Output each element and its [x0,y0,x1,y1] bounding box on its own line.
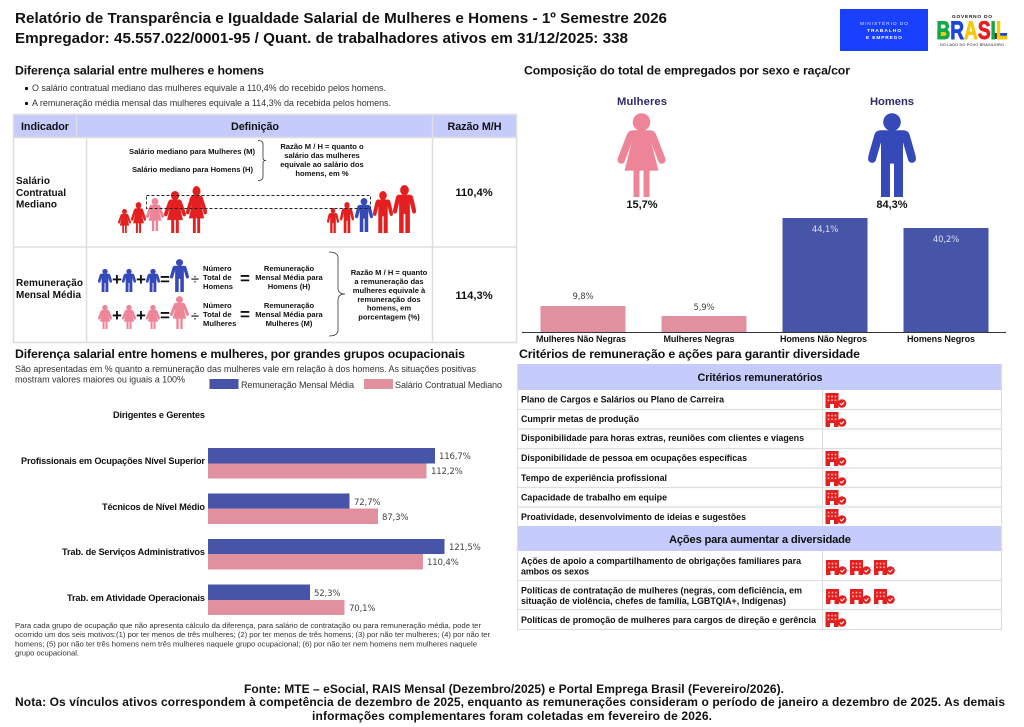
table header: Razão M/H [448,121,502,133]
bar chart: composição por sexo e raça/cor: Mulheres Não Negras [536,334,626,344]
category labels: Dirigentes e Gerentes [113,410,205,420]
list: critérios: Capacidade de trabalho em equipe [521,492,667,502]
values: 87,3% [382,513,408,523]
value: razão remuneração: 114,3% [455,290,493,302]
bar chart: composição por sexo e raça/cor: 44,1% [812,225,838,235]
bar chart: composição por sexo e raça/cor: 9,8% [572,292,594,302]
text block: nota de rodapé do gráfico: ocorrido um dos seis motivos:(1) por ter menos de três mulheres; (2) por ter menos de três homens; (3) por não ter mulheres; (4) por não ter [15,630,490,639]
definição: salário mediano: homens, em % [295,169,349,178]
pictogram: mulheres: 15,7% [626,199,658,211]
fórmula: homens: + [112,270,122,289]
text block: resumo: O salário contratual mediano das mulheres equivale a 110,4% do recebido pelos homens. [32,83,386,93]
values: 121,5% [449,543,481,553]
text block: nota de rodapé do gráfico: grupo ocupacional. [15,648,79,658]
list: ações: Políticas de contratação de mulheres (negras, com deficiência, em [521,586,802,596]
definição: salário mediano: equivale ao salário dos [280,160,364,169]
bar chart: composição por sexo e raça/cor: Homens Não Negros [780,334,867,344]
section header: critérios remuneratórios: Critérios remuneratórios [698,372,822,384]
title: Relatório de Transparência e Igualdade Salarial de Mulheres e Homens - 1º Semestre 2026 [15,10,667,27]
fórmula: mulheres: + [136,306,146,325]
logo: Ministério do Trabalho e Emprego: TRABALHO [867,28,901,34]
icons: ações [826,560,895,627]
category labels: Trab. em Atividade Operacionais [67,593,205,603]
logo: Ministério do Trabalho e Emprego [840,9,928,51]
heading: diferença por grupos ocupacionais: Diferença salarial entre homens e mulheres, por grandes grupos ocupacionais [15,347,465,361]
list: critérios: Disponibilidade de pessoa em ocupações específicas [521,453,747,463]
fórmula: homens: + [136,270,146,289]
pictogram: mulheres: Mulheres [617,96,667,108]
legend: Remuneração Mensal Média [241,380,355,390]
definição: salário mediano [129,140,364,180]
table header: Indicador [21,121,70,133]
fórmula: homens: Número [203,264,232,273]
fórmula: mulheres [98,296,324,329]
list: critérios: Cumprir metas de produção [521,414,640,424]
values: 70,1% [349,604,375,614]
definição: razão remuneração: remuneração dos [357,295,421,304]
row label: salário contratual mediano: Mediano [16,200,57,210]
list: critérios: Plano de Cargos e Salários ou Plano de Carreira [521,394,724,404]
definição: razão remuneração [329,252,428,336]
fórmula: homens: = [160,270,170,289]
bar chart: composição por sexo e raça/cor: Mulheres Negras [664,334,734,344]
text block: nota de rodapé do gráfico: Para cada grupo de ocupação que não apresenta cálculo da diferença, para salário de contratação ou para remuneração média, pode ter [15,621,481,630]
list: ações [521,556,816,625]
fórmula: mulheres: Remuneração [264,301,314,310]
pictogram: mulheres [617,96,667,211]
logo: Governo do Brasil: GOVERNO DO [952,14,992,20]
icon: fila de mulheres [118,186,207,233]
fórmula: mulheres: Total de [203,310,232,319]
fórmula: homens: Total de [203,273,232,282]
heading: composição: Composição do total de empregados por sexo e raça/cor [524,64,850,78]
list: critérios: Proatividade, desenvolvimento de ideias e sugestões [521,512,746,522]
logo: Governo do Brasil: BRASIL [936,17,1008,45]
row label: remuneração mensal média: Remuneração [16,278,83,289]
fórmula: mulheres: ÷ [191,308,199,325]
category labels: Trab. de Serviços Administrativos [62,547,205,557]
table header [21,121,502,133]
fórmula: homens [98,259,324,292]
values [314,452,481,614]
fórmula: mulheres: Mulheres (M) [266,319,313,328]
text block: explicação: mostram valores maiores ou iguais a 100% [15,374,185,384]
definição: razão remuneração: a remuneração das [354,277,424,286]
list: critérios: Disponibilidade para horas extras, reuniões com clientes e viagens [521,433,804,443]
pictogram: homens [868,96,916,211]
values: 112,2% [431,467,463,477]
list: ações: ambos os sexos [521,566,589,576]
values: 72,7% [354,498,380,508]
row label: salário contratual mediano: Contratual [16,188,66,199]
section header: ações: Ações para aumentar a diversidade [669,534,851,546]
bars [208,448,444,615]
icons: critérios [826,393,846,524]
panel: tabela de indicadores [13,114,517,342]
row label: salário contratual mediano: Salário [16,176,50,187]
category labels: Técnicos de Nível Médio [102,502,205,512]
values: 110,4% [427,558,459,568]
table header: Definição [231,121,279,133]
fórmula: mulheres: Mensal Média para [255,310,324,319]
footer: fonte e nota [15,682,1005,723]
fórmula: mulheres: Mulheres [203,319,236,328]
text block: resumo: A remuneração média mensal das mulheres equivale a 114,3% da recebida pelos homens. [32,98,391,108]
definição: razão remuneração: homens, em [367,304,411,312]
fórmula: mulheres: = [240,305,250,324]
logo: Ministério do Trabalho e Emprego: E EMPREGO [866,35,902,41]
definição: razão remuneração: mulheres equivale à [353,286,426,295]
title: Empregador: 45.557.022/0001-95 / Quant. de trabalhadores ativos em 31/12/2025: 338 [15,30,628,47]
list: critérios [521,394,804,522]
footer: fonte e nota: Fonte: MTE – eSocial, RAIS Mensal (Dezembro/2025) e Portal Emprega Brasil (Fevereiro/2026). [244,682,784,696]
text block: explicação: São apresentadas em % quanto a remuneração das mulheres vale em relação à dos homens. As situações positivas [15,364,476,374]
bar chart: composição por sexo e raça/cor [522,218,1006,344]
list: ações: Políticas de promoção de mulheres para cargos de direção e gerência [521,615,816,625]
fórmula: homens: ÷ [191,271,199,288]
fórmula: homens: Remuneração [264,264,314,273]
title [15,10,667,47]
icon: fila de homens [327,185,416,233]
fórmula: mulheres: + [112,306,122,325]
definição: salário mediano: Salário mediano para Homens (H) [132,165,253,174]
bar chart: grupos ocupacionais [21,410,481,615]
text block: resumo [25,83,391,108]
definição: salário mediano: salário das mulheres [284,151,360,160]
fórmula: homens: Homens [203,282,233,291]
definição: razão remuneração: porcentagem (%) [358,312,420,322]
heading: diferença salarial: Diferença salarial entre mulheres e homens [15,64,264,78]
bar chart: composição por sexo e raça/cor: Homens Negros [907,334,975,344]
fórmula: mulheres: = [160,306,170,325]
bar chart: composição por sexo e raça/cor: 40,2% [933,235,959,245]
fórmula: homens: Mensal Média para [255,273,324,282]
heading: critérios: Critérios de remuneração e ações para garantir diversidade [519,347,860,361]
values: 52,3% [314,589,340,599]
fórmula: mulheres: Número [203,301,232,310]
fórmula: homens: Homens (H) [268,282,311,291]
bar chart: composição por sexo e raça/cor: 5,9% [693,303,715,313]
logo: Governo do Brasil: DO LADO DO POVO BRASILEIRO [940,43,1004,47]
footer: fonte e nota: Nota: Os vínculos ativos correspondem à competência de dezembro de 2025, enquanto as remunerações consideram o período de janeiro a dezembro de 2025. As demais [15,695,1005,709]
text block: nota de rodapé do gráfico: homens; (5) por não ter três homens nem três mulheres naquele grupo ocupacional; (6) por não ter nem homens nem mulheres naquele [15,640,477,648]
definição: salário mediano: Razão M / H = quanto o [280,142,364,151]
list: ações: Ações de apoio a compartilhamento de obrigações familiares para [521,556,801,566]
definição: razão remuneração: Razão M / H = quanto [351,268,428,277]
legend [210,379,502,390]
category labels [21,410,205,603]
row label: remuneração mensal média: Mensal Média [16,290,81,301]
value: razão salário: 110,4% [455,187,493,199]
category labels: Profissionais em Ocupações Nível Superior [21,456,205,466]
list: critérios: Tempo de experiência profissional [521,473,667,483]
logo: Ministério do Trabalho e Emprego: MINISTÉRIO DO [860,20,908,27]
definição: salário mediano: Salário mediano para Mulheres (M) [129,147,255,156]
values: 116,7% [439,452,471,462]
list: ações: situação de violência, chefes de família, LGBTQIA+, Indígenas) [521,596,786,606]
footer: fonte e nota: informações complementares foram coletadas em fevereiro de 2026. [312,709,712,723]
legend: Salário Contratual Mediano [395,380,502,390]
fórmula: homens: = [240,269,250,288]
pictogram: homens: Homens [870,96,914,108]
pictogram: homens: 84,3% [876,199,908,211]
panel: critérios e ações [517,364,1002,630]
